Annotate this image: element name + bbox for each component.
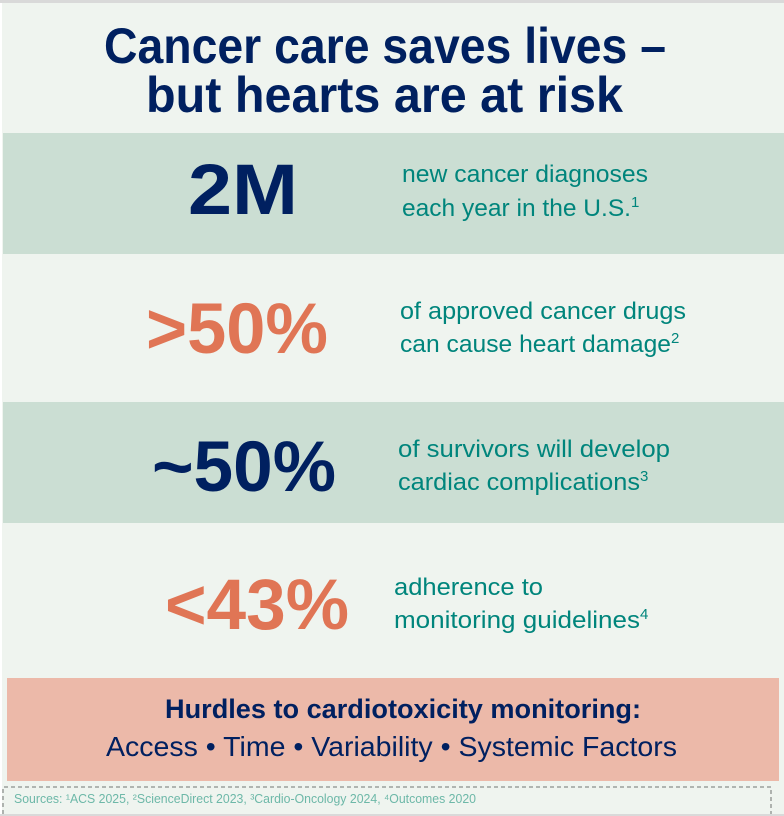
text: adherence xyxy=(394,574,648,634)
stat: 2M: 2M xyxy=(188,151,298,230)
panel: 2M new diagnoses xyxy=(3,133,784,254)
text: new diagnoses xyxy=(402,161,648,222)
text: adherence: adherence to xyxy=(394,574,543,601)
text: survivors: cardiac complications xyxy=(398,469,640,496)
text: approved drugs: of approved cancer drugs xyxy=(400,298,686,325)
sources box xyxy=(3,787,771,814)
text: survivors: 3 xyxy=(640,468,648,485)
sources text: Sources: ¹ACS 2025, ²ScienceDirect 2023, ³Cardio-Oncology 2024, ⁴Outcomes 2020 xyxy=(14,791,476,806)
text: adherence: 4 xyxy=(640,606,648,623)
text: survivors xyxy=(398,436,670,496)
text: new diagnoses: new cancer diagnoses xyxy=(402,161,648,188)
text: approved drugs: 2 xyxy=(671,330,679,347)
title xyxy=(104,18,666,123)
panel: hurdles xyxy=(7,678,779,781)
title: Cancer care saves lives – xyxy=(104,18,666,74)
text: survivors: of survivors will develop xyxy=(398,436,670,463)
title: but hearts are at risk xyxy=(146,67,623,123)
text: adherence: monitoring guidelines xyxy=(394,607,640,634)
stat: <43%: <43% xyxy=(165,566,349,645)
text: approved drugs xyxy=(400,298,686,358)
panel: under 43% adherence xyxy=(165,566,648,645)
text: new diagnoses: each year in the U.S. xyxy=(402,195,631,222)
stat: >50%: >50% xyxy=(146,290,328,369)
text: new diagnoses: 1 xyxy=(631,194,639,211)
text: approved drugs: can cause heart damage xyxy=(400,331,671,358)
stat: ~50%: ~50% xyxy=(152,428,336,507)
hurdles list: Access • Time • Variability • Systemic Factors xyxy=(106,731,677,762)
panel: about 50% survivors xyxy=(3,402,784,523)
panel: over 50% drugs xyxy=(146,290,686,369)
hurdles heading: Hurdles to cardiotoxicity monitoring: xyxy=(165,694,641,724)
